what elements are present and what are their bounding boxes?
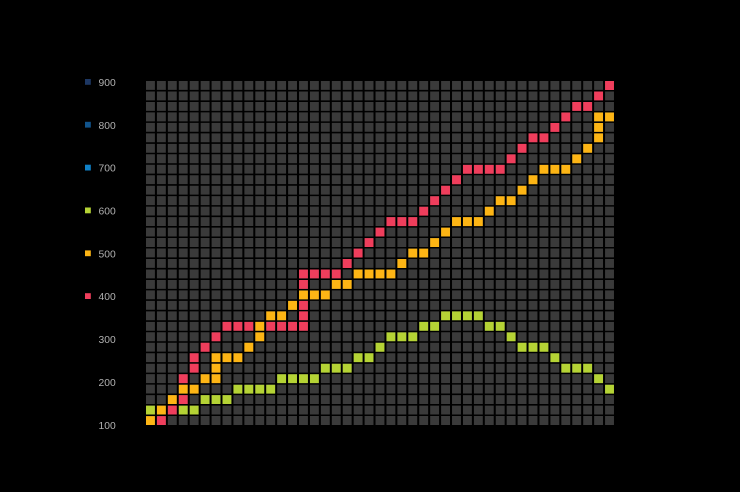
axis label: 100: 100: [98, 421, 116, 432]
y-axis legend: [85, 78, 116, 432]
legend item: 800: 800: [98, 121, 116, 132]
legend item: 500: 500: [98, 249, 116, 260]
legend item: 900: [85, 78, 116, 89]
series: red (400): [157, 81, 614, 425]
legend item: 800: [85, 121, 116, 132]
legend item: 900: 900: [98, 78, 116, 89]
axis label: 200: 200: [98, 378, 116, 389]
legend item: 600: 600: [98, 206, 116, 218]
legend item: 700: 700: [98, 164, 116, 175]
legend item: 400: [85, 292, 116, 303]
series: orange (500): [146, 112, 614, 425]
legend item: 600: [85, 206, 116, 218]
legend item: 700: [85, 164, 116, 175]
background cell grid: [146, 85, 614, 421]
axis label: 300: 300: [98, 335, 116, 346]
legend item: 400: 400: [98, 292, 116, 303]
chart: grid of cells with three series: [146, 81, 614, 425]
series: green (600): [146, 311, 614, 415]
legend item: 500: [85, 249, 116, 260]
